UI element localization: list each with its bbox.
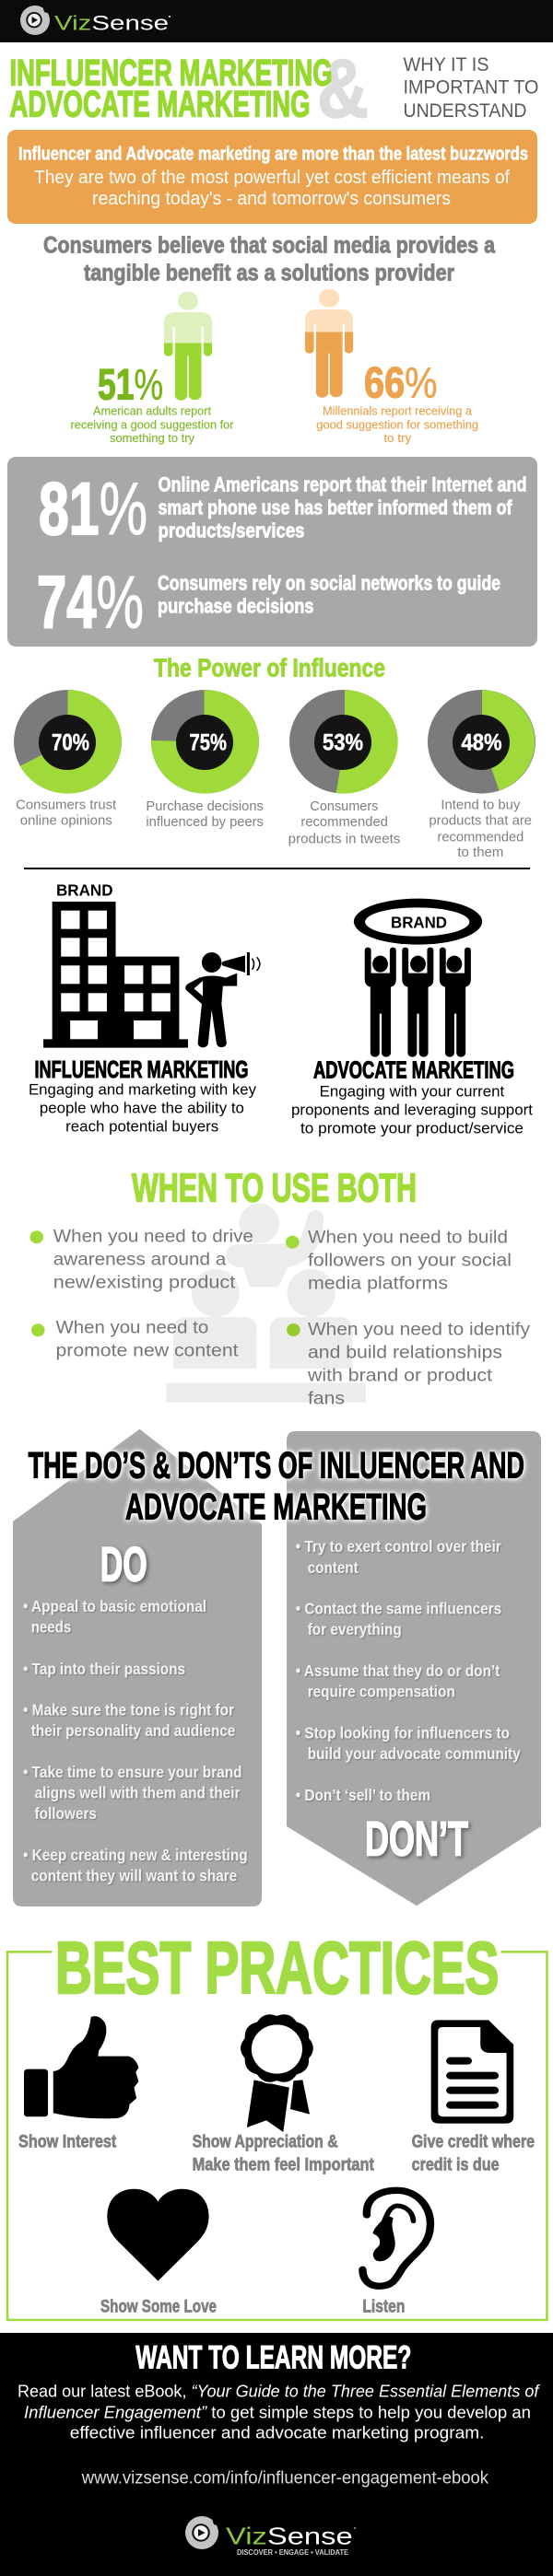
heading: do's and don'ts: ADVOCATE MARKETING bbox=[125, 1486, 427, 1527]
stat 74%: 74% bbox=[37, 562, 144, 645]
label: show appreciation bbox=[193, 2133, 375, 2175]
footer text: effective influencer and advocate marketing program. bbox=[70, 2423, 484, 2442]
caption: Millennials: to try bbox=[383, 431, 412, 445]
heading: consumers believe: tangible benefit as a solutions provider bbox=[84, 260, 454, 286]
intro text: They are two of the most powerful yet cost efficient means of bbox=[34, 168, 510, 188]
text: influencer description bbox=[29, 1082, 257, 1136]
caption 48%: to them bbox=[457, 845, 503, 860]
subtitle: WHY IT IS bbox=[404, 53, 488, 76]
list: don't: • Stop looking for influencers to bbox=[296, 1724, 510, 1743]
header bar bbox=[0, 0, 553, 42]
label: listen: Listen bbox=[362, 2298, 405, 2317]
label: show interest: Show Interest bbox=[18, 2133, 117, 2152]
list: do: • Take time to ensure your brand bbox=[23, 1763, 241, 1781]
list: do: followers bbox=[35, 1804, 97, 1823]
panel: don't arrow bbox=[287, 1431, 541, 1906]
list: when to use, right: media platforms bbox=[308, 1274, 448, 1294]
text: influencer description: Engaging and marketing with key bbox=[29, 1082, 257, 1099]
footer text: Read our latest eBook, “Your Guide to the Three Essential Elements of bbox=[18, 2383, 540, 2401]
list: don't bbox=[296, 1537, 521, 1804]
list: don't: • Don’t ‘sell’ to them bbox=[296, 1786, 430, 1804]
list: when to use, right: fans bbox=[308, 1388, 345, 1408]
caption: American adults bbox=[70, 404, 234, 445]
icon: brand ellipse: BRAND bbox=[391, 914, 447, 932]
caption: Millennials bbox=[316, 404, 478, 445]
icon: person with megaphone bbox=[185, 952, 260, 1047]
panel: do arrow bbox=[13, 1429, 262, 1906]
caption 75% bbox=[146, 799, 264, 830]
subtitle bbox=[404, 53, 538, 122]
footer logo: DISCOVER • ENGAGE • VALIDATE bbox=[237, 2548, 349, 2557]
donut 53%: 53% bbox=[323, 729, 363, 755]
footer text bbox=[18, 2383, 540, 2442]
list: when to use, right: followers on your social bbox=[308, 1250, 512, 1270]
caption: American adults: something to try bbox=[110, 431, 194, 445]
donut 70%: 70% bbox=[52, 729, 89, 755]
title: ADVOCATE MARKETING bbox=[9, 85, 310, 125]
icon: brand ellipse bbox=[354, 899, 482, 945]
donut 75% bbox=[151, 690, 259, 794]
label: brand on building: BRAND bbox=[56, 881, 112, 900]
list: don't: • Contact the same influencers bbox=[296, 1600, 501, 1618]
list: when to use, left: promote new content bbox=[55, 1341, 239, 1361]
caption 48% bbox=[429, 798, 532, 860]
heading: power of influence: The Power of Influence bbox=[154, 653, 385, 682]
icon: document bbox=[431, 2020, 513, 2124]
caption: Millennials: good suggestion for something bbox=[316, 418, 478, 432]
donut 70% bbox=[14, 690, 122, 794]
heading: influencer marketing: INFLUENCER MARKETING bbox=[35, 1057, 249, 1083]
list: do: • Make sure the tone is right for bbox=[23, 1701, 234, 1719]
text: consumers rely bbox=[158, 572, 500, 618]
icon: three advocates bbox=[365, 948, 471, 1057]
icon: building bbox=[43, 902, 188, 1048]
text: online Americans: products/services bbox=[159, 519, 304, 542]
intro text: reaching today's - and tomorrow's consumers bbox=[92, 189, 451, 209]
label: give credit: credit is due bbox=[412, 2156, 500, 2175]
list: when to use, right: When you need to identify bbox=[308, 1319, 530, 1339]
caption 48%: products that are bbox=[429, 813, 532, 828]
list: when to use, left: When you need to bbox=[55, 1318, 208, 1338]
heading: when to use both: WHEN TO USE BOTH bbox=[132, 1165, 417, 1210]
title: INFLUENCER MARKETING bbox=[9, 53, 332, 94]
footer panel bbox=[0, 2333, 553, 2576]
frame: best practices bbox=[7, 1952, 547, 2320]
logo: VizSense bbox=[20, 6, 171, 35]
caption: American adults: receiving a good suggestion for bbox=[70, 418, 234, 432]
caption: American adults: American adults report bbox=[93, 404, 211, 418]
label: give credit bbox=[412, 2133, 535, 2175]
icon: ear bbox=[362, 2190, 430, 2286]
text: advocate description: to promote your product/service bbox=[300, 1121, 524, 1137]
text: influencer description: reach potential buyers bbox=[65, 1119, 218, 1136]
footer logo bbox=[185, 2516, 356, 2557]
list: when to use, right bbox=[286, 1227, 530, 1408]
caption 75%: Purchase decisions bbox=[146, 799, 264, 814]
caption 70%: online opinions bbox=[20, 813, 112, 828]
donut 48% bbox=[428, 690, 535, 794]
list: do: content they will want to share bbox=[31, 1867, 237, 1885]
stat 81%: 81% bbox=[39, 468, 147, 551]
icon: orange person 66% bbox=[305, 289, 353, 398]
list: do: their personality and audience bbox=[31, 1721, 236, 1740]
icon: ribbon bbox=[240, 2013, 314, 2132]
icon: thumbs up bbox=[24, 2016, 138, 2118]
text: consumers rely: purchase decisions bbox=[158, 595, 313, 618]
title bbox=[9, 53, 332, 125]
caption 48%: recommended bbox=[437, 830, 524, 845]
intro text bbox=[34, 168, 510, 209]
subtitle: UNDERSTAND bbox=[404, 99, 527, 122]
label: don't: DON’T bbox=[365, 1812, 468, 1866]
list: when to use, left: awareness around a bbox=[53, 1250, 226, 1270]
icon: background people bbox=[167, 1204, 366, 1403]
panel: orange intro bbox=[7, 130, 537, 224]
stat 51%: 51% bbox=[98, 359, 163, 408]
list: do: • Keep creating new & interesting bbox=[23, 1846, 248, 1864]
list: when to use, right: When you need to build bbox=[308, 1227, 508, 1247]
list: don't: build your advocate community bbox=[308, 1744, 521, 1763]
caption 53% bbox=[288, 799, 400, 846]
list: don't: content bbox=[308, 1558, 359, 1577]
label: show appreciation: Show Appreciation & bbox=[193, 2133, 338, 2152]
list: do bbox=[23, 1597, 248, 1885]
text: advocate description bbox=[291, 1084, 533, 1137]
caption 70% bbox=[16, 798, 116, 828]
stat 66%: 66% bbox=[364, 358, 437, 407]
caption: Millennials: Millennials report receiving a bbox=[323, 404, 473, 418]
caption 53%: recommended bbox=[300, 815, 388, 830]
text: advocate description: proponents and leveraging support bbox=[291, 1102, 533, 1119]
footer logo: Viz Sense bbox=[226, 2523, 353, 2550]
caption 53%: Consumers bbox=[310, 799, 378, 814]
panel: grey stats bbox=[7, 457, 537, 647]
label: show some love: Show Some Love bbox=[100, 2298, 217, 2317]
text: influencer description: people who have the ability to bbox=[40, 1101, 244, 1117]
list: don't: • Assume that they do or don’t bbox=[296, 1661, 500, 1680]
list: don't: • Try to exert control over their bbox=[296, 1537, 501, 1556]
heading: consumers believe bbox=[43, 232, 496, 286]
list: don't: require compensation bbox=[308, 1683, 455, 1701]
footer url: www.vizsense.com/info/influencer-engagement-ebook bbox=[81, 2469, 488, 2489]
label: show appreciation: Make them feel Important bbox=[193, 2156, 375, 2175]
list: do: • Tap into their passions bbox=[23, 1660, 185, 1678]
text: advocate description: Engaging with your current bbox=[320, 1084, 505, 1101]
caption 70%: Consumers trust bbox=[16, 798, 116, 812]
list: when to use, right: and build relationships bbox=[308, 1342, 502, 1362]
footer heading: WANT TO LEARN MORE? bbox=[135, 2340, 411, 2376]
list: when to use, left: new/existing product bbox=[53, 1273, 236, 1293]
list: don't: for everything bbox=[308, 1620, 402, 1638]
caption 48%: Intend to buy bbox=[441, 798, 521, 812]
text: online Americans bbox=[159, 472, 527, 542]
logo: VizSense: Viz Sense bbox=[54, 11, 169, 35]
subtitle: IMPORTANT TO bbox=[404, 76, 538, 99]
caption 53%: products in tweets bbox=[288, 832, 400, 846]
donut 48%: 48% bbox=[461, 729, 501, 755]
footer text: Influencer Engagement” to get simple steps to help you develop an bbox=[24, 2403, 531, 2421]
icon: heart bbox=[107, 2189, 209, 2281]
icon: green person 51% bbox=[164, 292, 212, 401]
ampersand: & bbox=[317, 43, 369, 135]
heading: do's and don'ts bbox=[29, 1445, 524, 1527]
donut 75%: 75% bbox=[190, 729, 227, 755]
list: do: aligns well with them and their bbox=[35, 1784, 241, 1802]
list: when to use, left: When you need to drive bbox=[53, 1227, 253, 1247]
donut 53% bbox=[289, 690, 398, 794]
list: do: • Appeal to basic emotional bbox=[23, 1597, 206, 1615]
list: when to use, left bbox=[29, 1227, 253, 1361]
label: do: DO bbox=[100, 1538, 147, 1592]
list: when to use, right: with brand or product bbox=[307, 1365, 493, 1385]
caption 75%: influenced by peers bbox=[146, 815, 264, 830]
list: do: needs bbox=[31, 1618, 72, 1637]
